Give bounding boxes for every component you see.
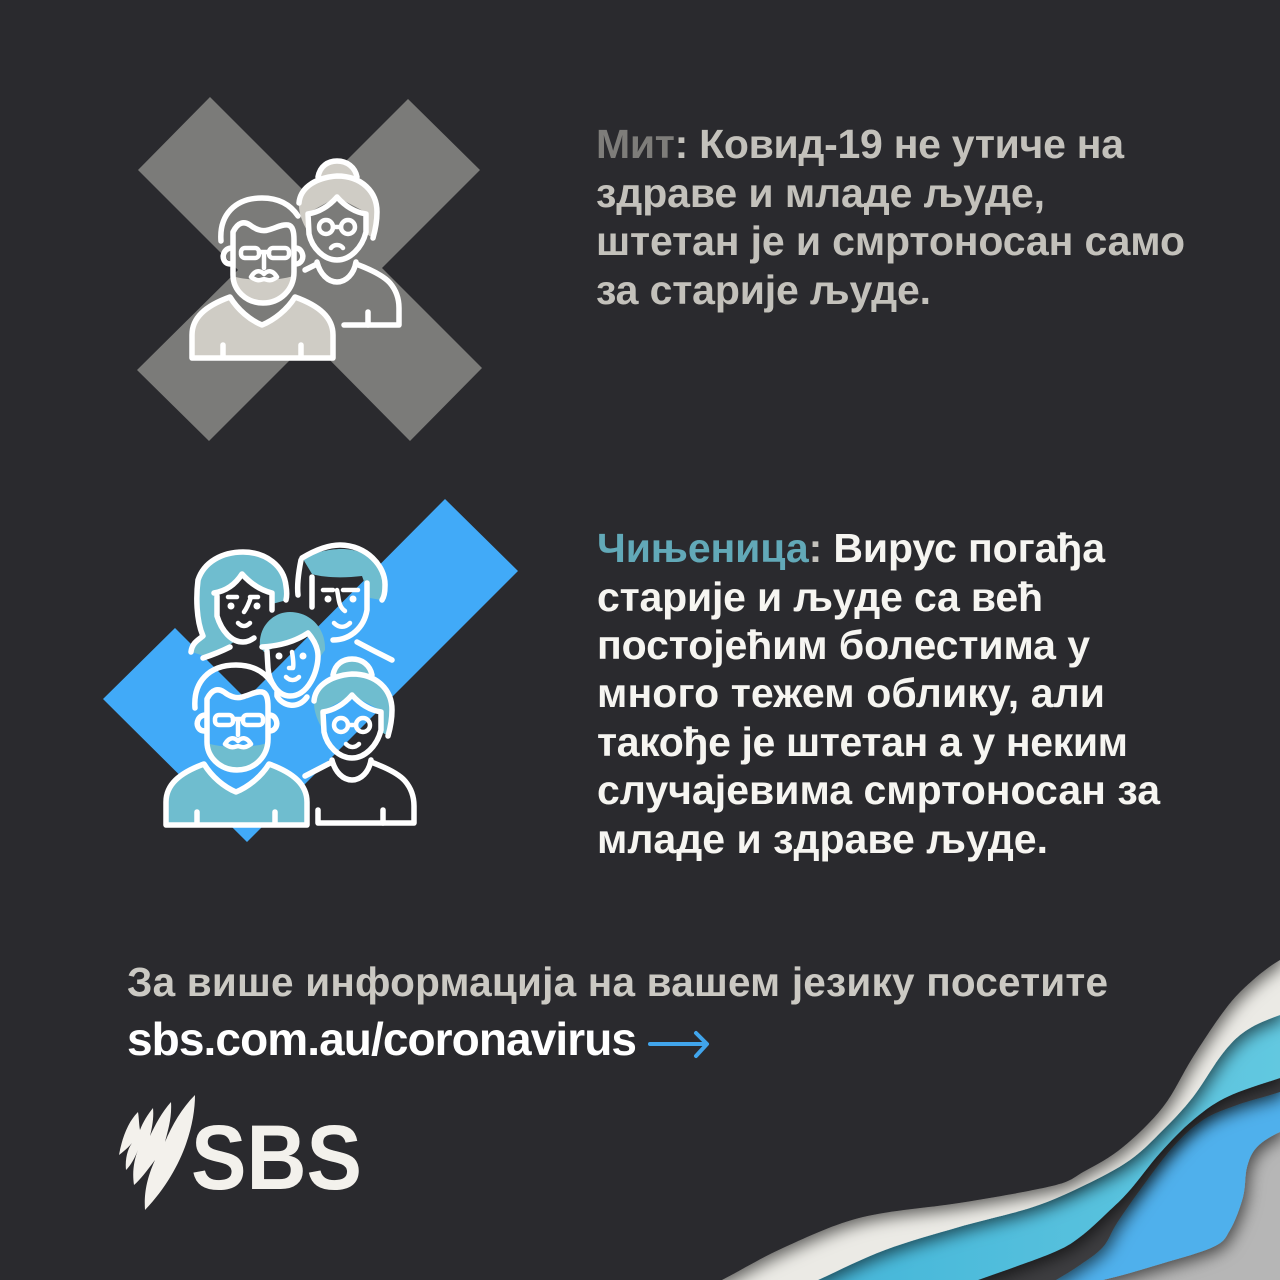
older man bottom left: [166, 665, 307, 825]
fact text block: [597, 525, 1161, 862]
fact text block: постојећим болестима у: [597, 622, 1090, 668]
older woman bottom right: [305, 659, 414, 823]
icon: blue check mark with group of people: [103, 499, 518, 842]
arrow: [650, 1033, 707, 1056]
fact text block: много тежем облику, али: [597, 670, 1105, 716]
man top right: [298, 545, 392, 660]
call to action text: За више информација на вашем језику посетите: [127, 959, 1108, 1005]
myth text block: здраве и младе људе,: [596, 170, 1045, 216]
myth text block: Мит: Ковид-19 не утиче на: [596, 121, 1125, 167]
icon: grey cross with older couple: [137, 97, 482, 441]
grey X mark: [137, 97, 482, 441]
mercury symbol: [119, 1095, 195, 1210]
myth text block: [596, 121, 1185, 313]
older man figure: [192, 198, 333, 358]
cream wave: [700, 950, 1280, 1280]
woman top left: [191, 552, 287, 658]
teal wave: [800, 1000, 1280, 1280]
fact text block: случајевима смртоносан за: [597, 767, 1161, 813]
older woman figure: [299, 160, 399, 325]
website link: sbs.com.au/coronavirus: [127, 1013, 637, 1065]
grey wave: [1000, 1100, 1280, 1280]
SBS logo: [119, 1095, 362, 1210]
myth text block: за старије људе.: [596, 267, 931, 313]
fact text block: такође је штетан а у неким: [597, 719, 1128, 765]
fact text block: младе и здраве људе.: [597, 816, 1048, 862]
SBS wordmark: SBS: [191, 1107, 362, 1209]
blue tick: [103, 499, 518, 842]
dark wave: [950, 1040, 1280, 1280]
fact text block: Чињеница: Вирус погађа: [597, 525, 1106, 571]
child in the middle: [260, 612, 325, 705]
myth text block: штетан је и смртоносан само: [596, 218, 1185, 264]
blue wave: [1000, 1060, 1280, 1280]
fact text block: старије и људе са већ: [597, 574, 1043, 620]
